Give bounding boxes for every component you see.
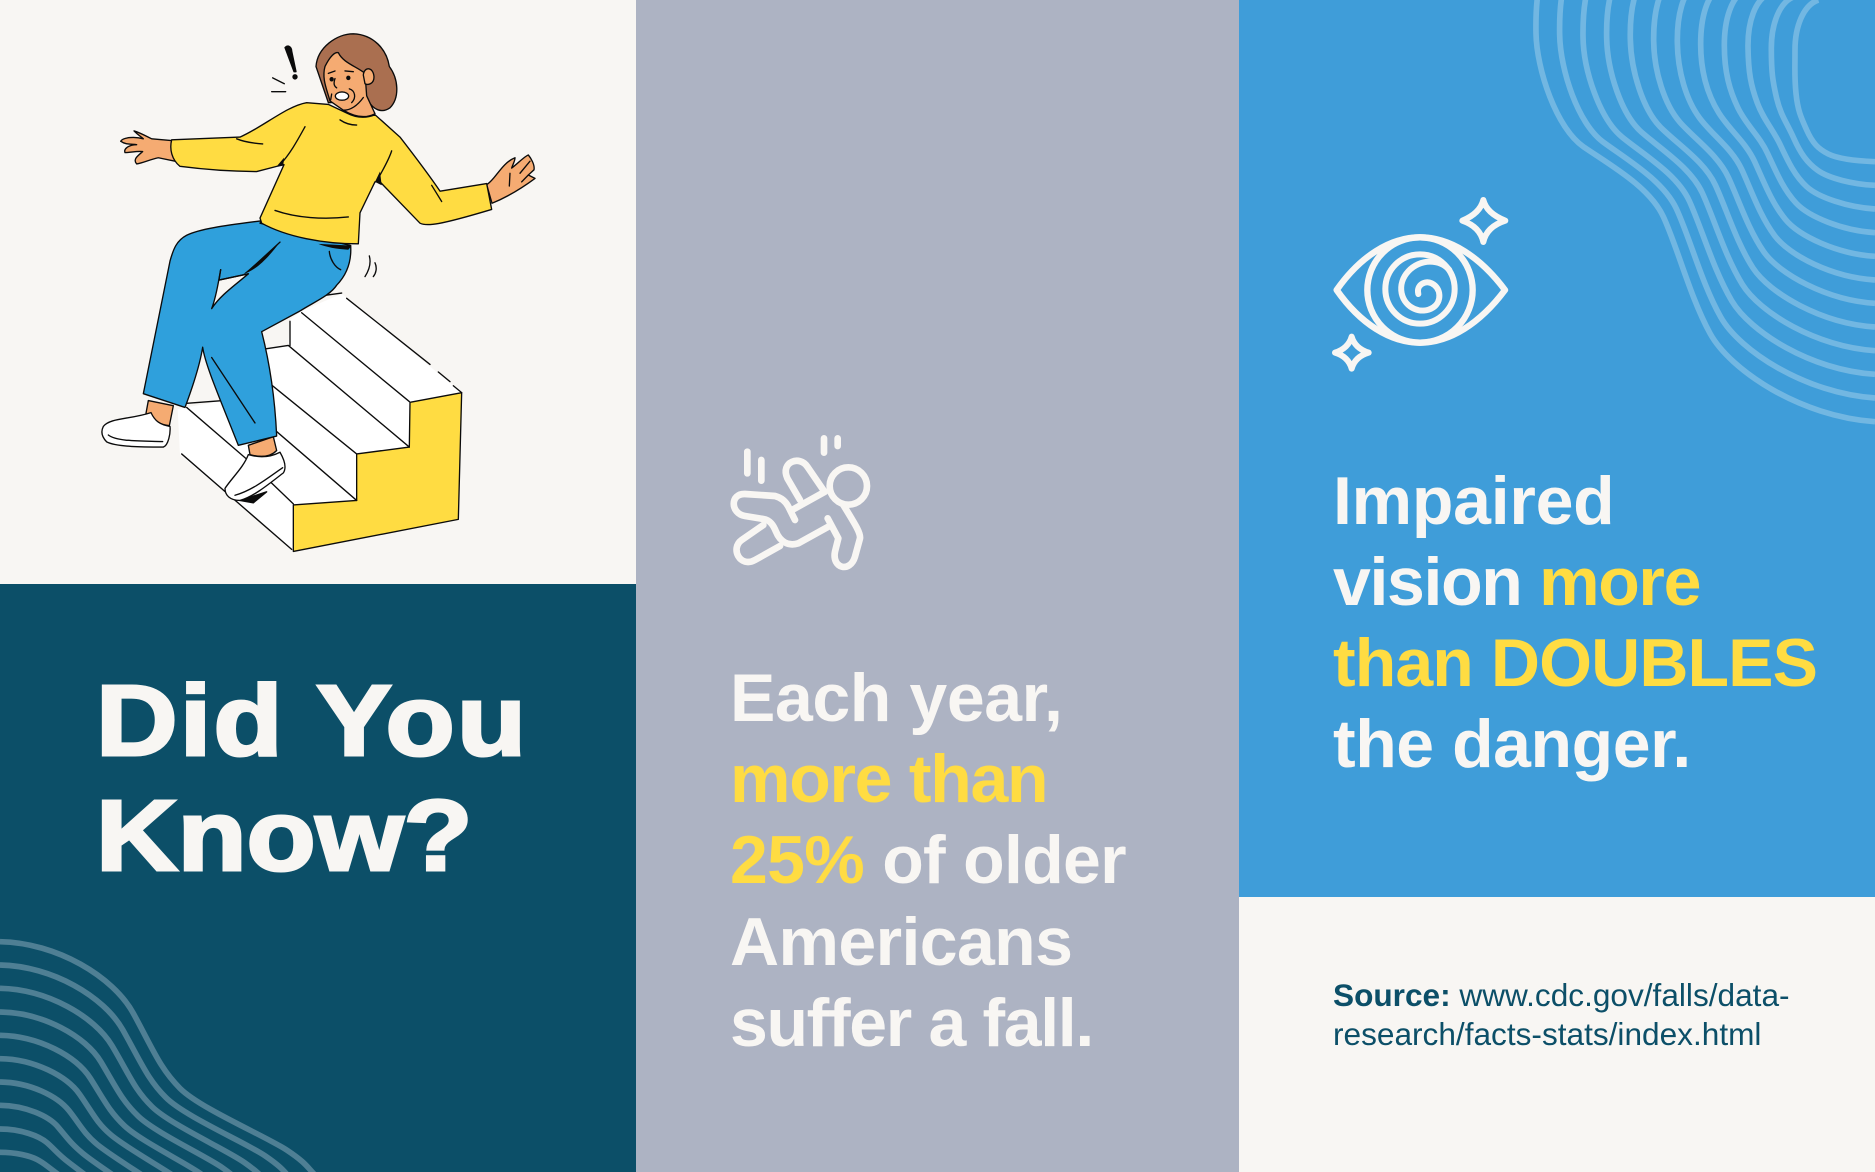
text block: vision statistic: the danger.	[1333, 706, 1691, 782]
text block: vision statistic: Impaired	[1333, 463, 1614, 539]
left foot	[102, 401, 173, 447]
left hand	[121, 131, 175, 164]
stairs	[178, 293, 462, 551]
text block: source: research/facts-stats/index.html	[1333, 1016, 1761, 1052]
text block: fall statistic: 25% of older	[730, 822, 1126, 898]
trousers	[143, 221, 351, 445]
panel: fall statistic	[636, 0, 1239, 1172]
heading: did you know: Know?	[96, 780, 473, 892]
head	[316, 34, 397, 117]
icon: person falling	[734, 438, 867, 567]
icon: eye with spiral and sparkles	[1335, 200, 1505, 369]
sweater	[171, 103, 492, 250]
panel: vision statistic	[1239, 0, 1875, 897]
text block: vision statistic: vision more	[1333, 544, 1700, 620]
exclamation mark and motion lines	[272, 46, 376, 277]
text block: fall statistic	[730, 660, 1126, 1061]
right hand	[487, 155, 535, 203]
illustration: woman falling on stairs	[102, 34, 535, 551]
text block: fall statistic: Americans	[730, 904, 1072, 980]
panel: did you know	[0, 584, 636, 1172]
panel: source	[1239, 897, 1875, 1172]
panel: illustration background	[0, 0, 636, 584]
right foot	[225, 437, 285, 503]
wave pattern: bottom left	[0, 942, 317, 1172]
text block: fall statistic: suffer a fall.	[730, 985, 1093, 1061]
text block: source	[1333, 977, 1790, 1052]
text block: fall statistic: more than	[730, 741, 1047, 817]
text block: fall statistic: Each year,	[730, 660, 1062, 736]
text block: vision statistic: than DOUBLES	[1333, 625, 1817, 701]
heading: did you know: Did You	[96, 665, 528, 777]
text block: source: Source: www.cdc.gov/falls/data-	[1333, 977, 1790, 1013]
wave pattern: top right	[1536, 0, 1875, 422]
text block: vision statistic	[1333, 463, 1817, 782]
heading: did you know	[96, 665, 528, 892]
